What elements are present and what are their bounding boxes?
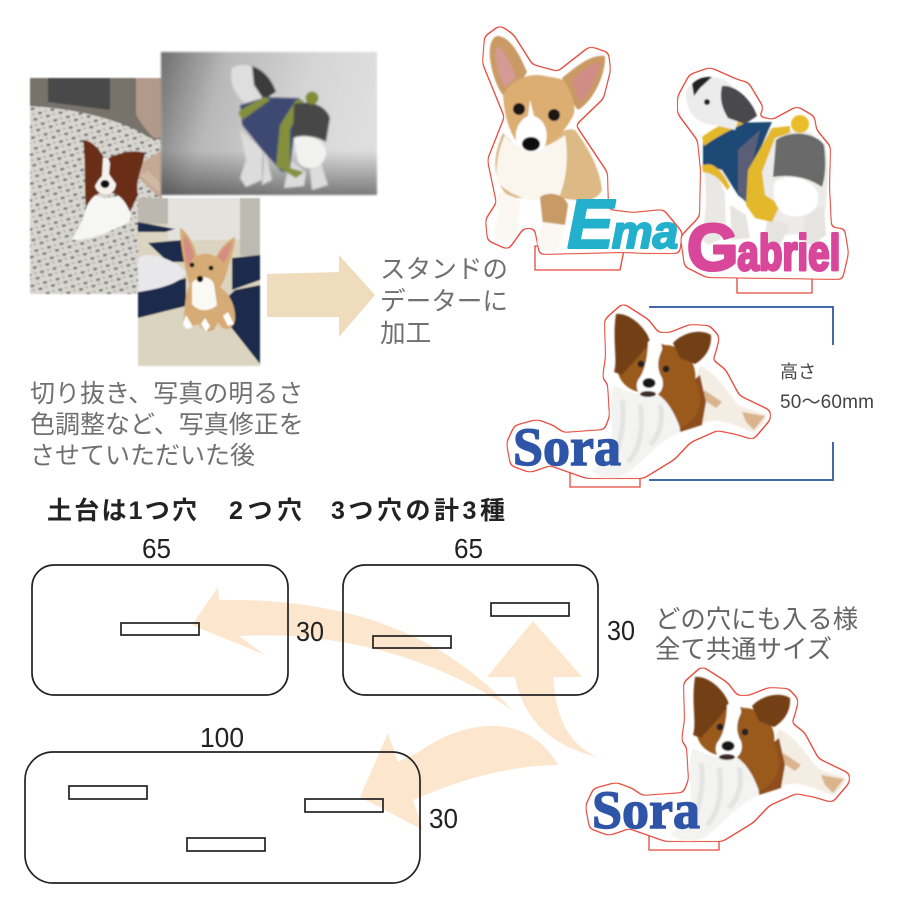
stand: Sora example [586, 667, 849, 850]
stand: Sora papillon: Sora [513, 417, 621, 477]
base: three holes [25, 752, 420, 883]
heading: three base types: 3つ穴の計3種 [331, 497, 505, 525]
dimension labels: 65 [142, 533, 171, 564]
dimension labels [142, 533, 635, 834]
stand: Ema corgi: Ema [567, 185, 678, 263]
stand: Ema corgi [483, 26, 682, 270]
curved arrows: stand to each base [192, 587, 597, 830]
heading: three base types: 2つ穴 [229, 497, 302, 525]
text: photo retouch note: させていただいた後 [30, 442, 255, 470]
photo: corgi on checker floor [138, 198, 260, 366]
dimension labels: 30 [296, 616, 324, 647]
stand: Sora papillon [507, 304, 770, 487]
photo: shih tzu on grey ground [161, 52, 377, 195]
stand: Gabriel shih tzu [678, 68, 848, 293]
photo: papillon on blanket [30, 78, 162, 294]
text: stand data processing: 加工 [380, 320, 431, 348]
dimension labels: 30 [429, 803, 458, 834]
dimension labels: 65 [454, 533, 483, 564]
text: stand data processing: スタンドの [380, 256, 508, 284]
dimension labels: 100 [200, 722, 244, 753]
base: one hole [32, 565, 288, 695]
stand: Sora example: Sora [592, 780, 700, 840]
text: stand data processing: データーに [380, 287, 508, 316]
arrow: photos to stand data [267, 255, 375, 337]
text: photo retouch note: 切り抜き、写真の明るさ [30, 380, 303, 408]
dimension labels: 30 [607, 615, 635, 646]
text: height 50-60mm: 50～60mm [780, 392, 874, 413]
heading: three base types: 土台は1つ穴 [47, 497, 197, 525]
text: common size note: 全て共通サイズ [655, 636, 832, 664]
bracket: height dimension [649, 307, 833, 480]
stand: Gabriel shih tzu: Gabriel [687, 210, 840, 284]
text: height 50-60mm: 高さ [780, 362, 816, 382]
text: common size note: どの穴にも入る様 [655, 606, 858, 634]
text: photo retouch note: 色調整など、写真修正を [30, 411, 304, 439]
base: two holes [343, 565, 598, 695]
